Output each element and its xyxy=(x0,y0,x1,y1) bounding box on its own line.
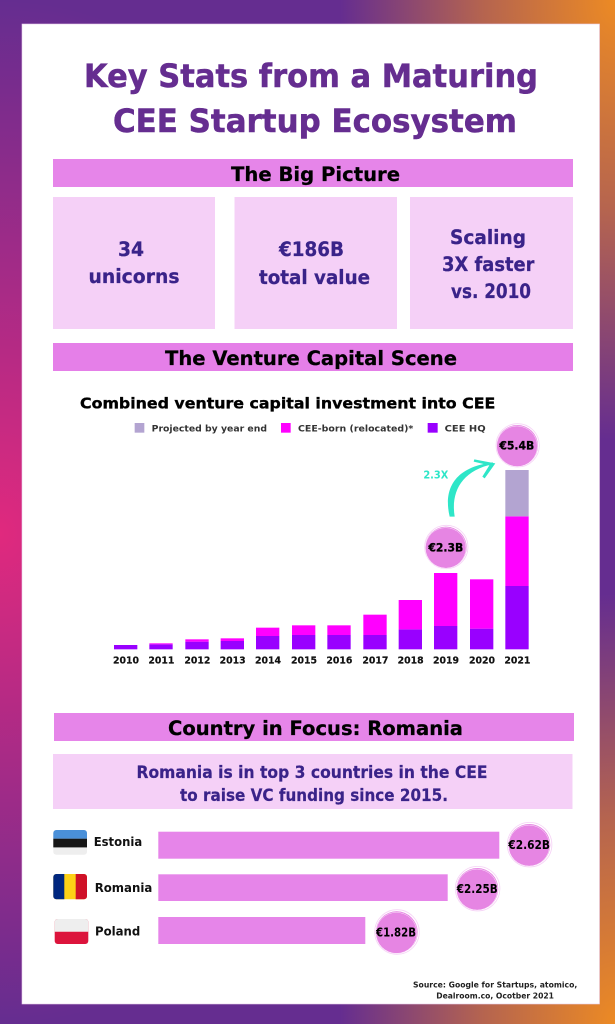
panel: stat total value: €186B xyxy=(278,238,344,261)
icon: Polish flag xyxy=(55,919,88,944)
section header: Country in Focus: Country in Focus: Romania xyxy=(168,717,463,740)
panel: stat scaling xyxy=(410,197,573,329)
year axis labels: 2021 xyxy=(504,655,531,666)
source note: Dealroom.co, Ocotber 2021 xyxy=(436,991,554,1000)
year axis labels: 2015 xyxy=(291,655,317,666)
year axis labels: 2016 xyxy=(326,655,353,666)
row: Estonia: Estonia xyxy=(94,834,142,849)
year axis labels: 2014 xyxy=(255,655,281,666)
panel: stat scaling: 3X faster xyxy=(442,253,535,276)
row: Poland: €1.82B xyxy=(375,925,416,939)
background: gradient bottom half xyxy=(0,534,615,1024)
callout: 2.3B in 2019: €2.3B xyxy=(427,540,463,554)
panel: stat 34 unicorns xyxy=(53,197,215,329)
panel: stat total value: total value xyxy=(259,266,370,289)
bar: projected by year end xyxy=(505,470,529,516)
callout: 2.3B in 2019 xyxy=(425,525,468,569)
panel: stat 34 unicorns: unicorns xyxy=(88,265,180,288)
chart legend: Projected by year end xyxy=(152,424,267,434)
bars: CEE-born relocated xyxy=(149,516,529,644)
chart legend: CEE-born (relocated)* xyxy=(298,424,414,434)
panel: Romania statement: Romania is in top 3 countries in the CEE xyxy=(136,763,488,782)
row: Poland xyxy=(55,910,419,954)
year axis labels: 2011 xyxy=(148,655,175,666)
callout: 5.4B in 2021 xyxy=(496,424,539,467)
year axis labels: 2012 xyxy=(184,655,210,666)
row: Estonia xyxy=(53,822,552,867)
section header: Country in Focus xyxy=(54,713,574,741)
year axis labels: 2019 xyxy=(433,655,459,666)
panel: stat 34 unicorns: 34 xyxy=(118,238,144,261)
label: 2.3X: 2.3X xyxy=(423,469,448,482)
year axis labels: 2020 xyxy=(469,655,495,666)
title: Key Stats from a Maturing xyxy=(84,57,538,95)
section header: The Big Picture: The Big Picture xyxy=(231,163,400,186)
year axis labels: 2018 xyxy=(398,655,424,666)
title: CEE Startup Ecosystem xyxy=(113,102,517,140)
section header: The Big Picture xyxy=(53,159,573,187)
source note xyxy=(413,980,577,1000)
year axis labels: 2010 xyxy=(113,655,139,666)
year axis labels: 2017 xyxy=(362,655,388,666)
panel: Romania statement: to raise VC funding since 2015. xyxy=(180,786,448,805)
panel: stat scaling: vs. 2010 xyxy=(451,280,531,303)
row: Poland: Poland xyxy=(95,924,140,939)
chart legend: CEE HQ xyxy=(445,424,486,434)
year axis labels: 2013 xyxy=(220,655,246,666)
panel: stat scaling: Scaling xyxy=(450,226,526,249)
panel: Romania statement xyxy=(53,754,572,809)
chart title: Combined venture capital investment into CEE xyxy=(80,394,495,412)
row: Romania: €2.25B xyxy=(456,882,498,896)
row: Romania: Romania xyxy=(95,880,152,895)
panel: stat total value xyxy=(234,197,397,329)
chart legend xyxy=(135,423,486,434)
title xyxy=(84,57,538,140)
section header: The Venture Capital Scene xyxy=(53,343,573,371)
source note: Source: Google for Startups, atomico, xyxy=(413,980,577,990)
arrow: growth from 2019 to 2021 xyxy=(448,459,495,517)
section header: The Venture Capital Scene: The Venture Capital Scene xyxy=(165,347,457,370)
chart: combined venture capital investment xyxy=(80,394,540,666)
row: Romania xyxy=(53,866,500,911)
callout: 5.4B in 2021: €5.4B xyxy=(498,439,534,453)
icon: Estonian flag xyxy=(53,830,87,855)
icon: Romanian flag xyxy=(53,874,87,899)
background: gradient top half xyxy=(0,0,615,534)
year axis labels xyxy=(113,655,531,666)
row: Estonia: €2.62B xyxy=(507,838,550,852)
bars: CEE HQ xyxy=(114,586,529,649)
